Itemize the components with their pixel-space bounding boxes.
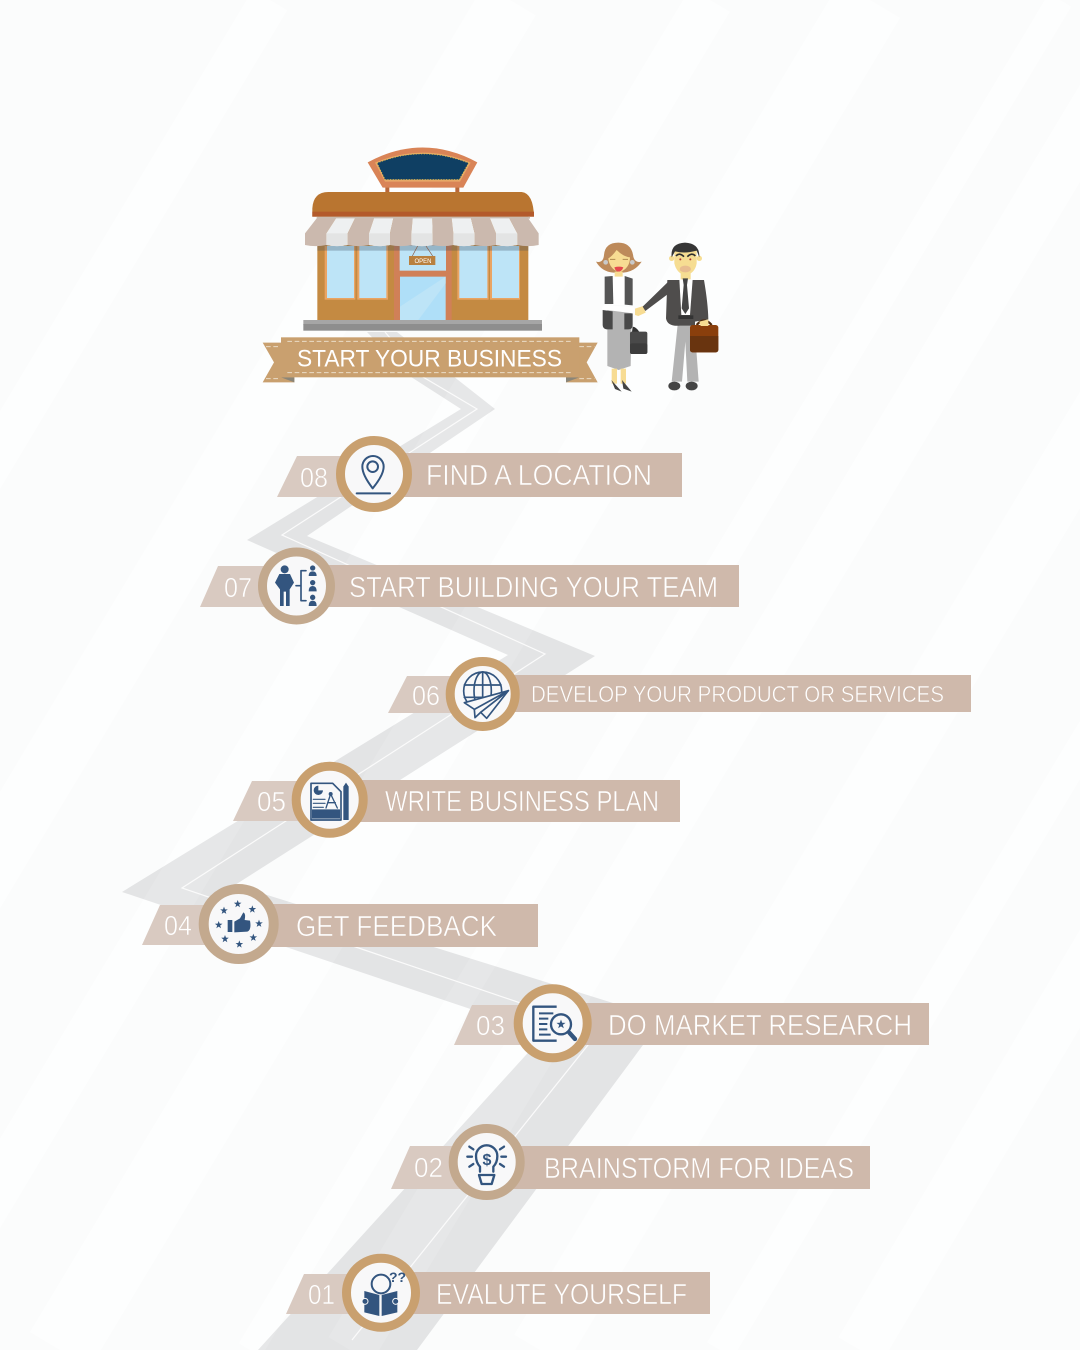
step 03: do market research	[454, 989, 929, 1058]
storefront illustration	[303, 147, 542, 331]
step 05: write business plan: 05	[257, 786, 286, 817]
step 05: write business plan: WRITE BUSINESS PLAN	[385, 786, 659, 818]
step 02: brainstorm for ideas	[391, 1128, 870, 1196]
step 02: brainstorm for ideas: BRAINSTORM FOR IDEAS	[544, 1153, 854, 1185]
step 01: evalute yourself: EVALUTE YOURSELF	[436, 1279, 687, 1311]
woman	[596, 243, 647, 392]
icon: light bulb with dollar	[467, 1145, 506, 1184]
dollar sign: $	[483, 1152, 492, 1169]
icon: team hierarchy	[275, 565, 317, 606]
step 03: do market research: DO MARKET RESEARCH	[608, 1010, 912, 1042]
step 07: start building your team: 07	[224, 572, 252, 603]
question marks: ??	[389, 1269, 406, 1285]
winding road	[122, 332, 643, 1350]
step 08: find a location	[277, 440, 682, 508]
icon: map pin	[357, 456, 390, 493]
step 03: do market research: 03	[476, 1010, 505, 1041]
step 04: get feedback	[142, 889, 538, 959]
step 06: develop your product or services	[388, 662, 971, 726]
step 06: develop your product or services: 06	[412, 680, 440, 711]
ribbon banner: start your business: START YOUR BUSINESS	[297, 346, 562, 372]
step 08: find a location: FIND A LOCATION	[426, 460, 652, 492]
step 01: evalute yourself	[286, 1258, 710, 1327]
icon: business plan document	[311, 783, 349, 820]
step 06: develop your product or services: DEVELOP YOUR PRODUCT OR SERVICES	[531, 681, 944, 707]
man	[643, 243, 718, 390]
icon: document with magnifier	[533, 1007, 575, 1041]
ribbon banner: start your business	[263, 337, 598, 382]
open sign label: OPEN	[414, 259, 432, 265]
icon: globe and paper plane	[464, 672, 508, 718]
step 01: evalute yourself: 01	[308, 1279, 335, 1310]
step 07: start building your team: START BUILDING YOUR TEAM	[349, 572, 718, 604]
step 05: write business plan	[233, 766, 680, 833]
icon: thumbs up with stars	[215, 900, 263, 948]
step 04: get feedback: GET FEEDBACK	[296, 911, 498, 943]
icon: person reading book	[362, 1275, 399, 1316]
step 08: find a location: 08	[300, 462, 328, 493]
step 07: start building your team	[200, 552, 739, 620]
step 02: brainstorm for ideas: 02	[414, 1152, 443, 1183]
illustration: business people shaking hands	[596, 243, 718, 392]
step 04: get feedback: 04	[164, 910, 192, 941]
